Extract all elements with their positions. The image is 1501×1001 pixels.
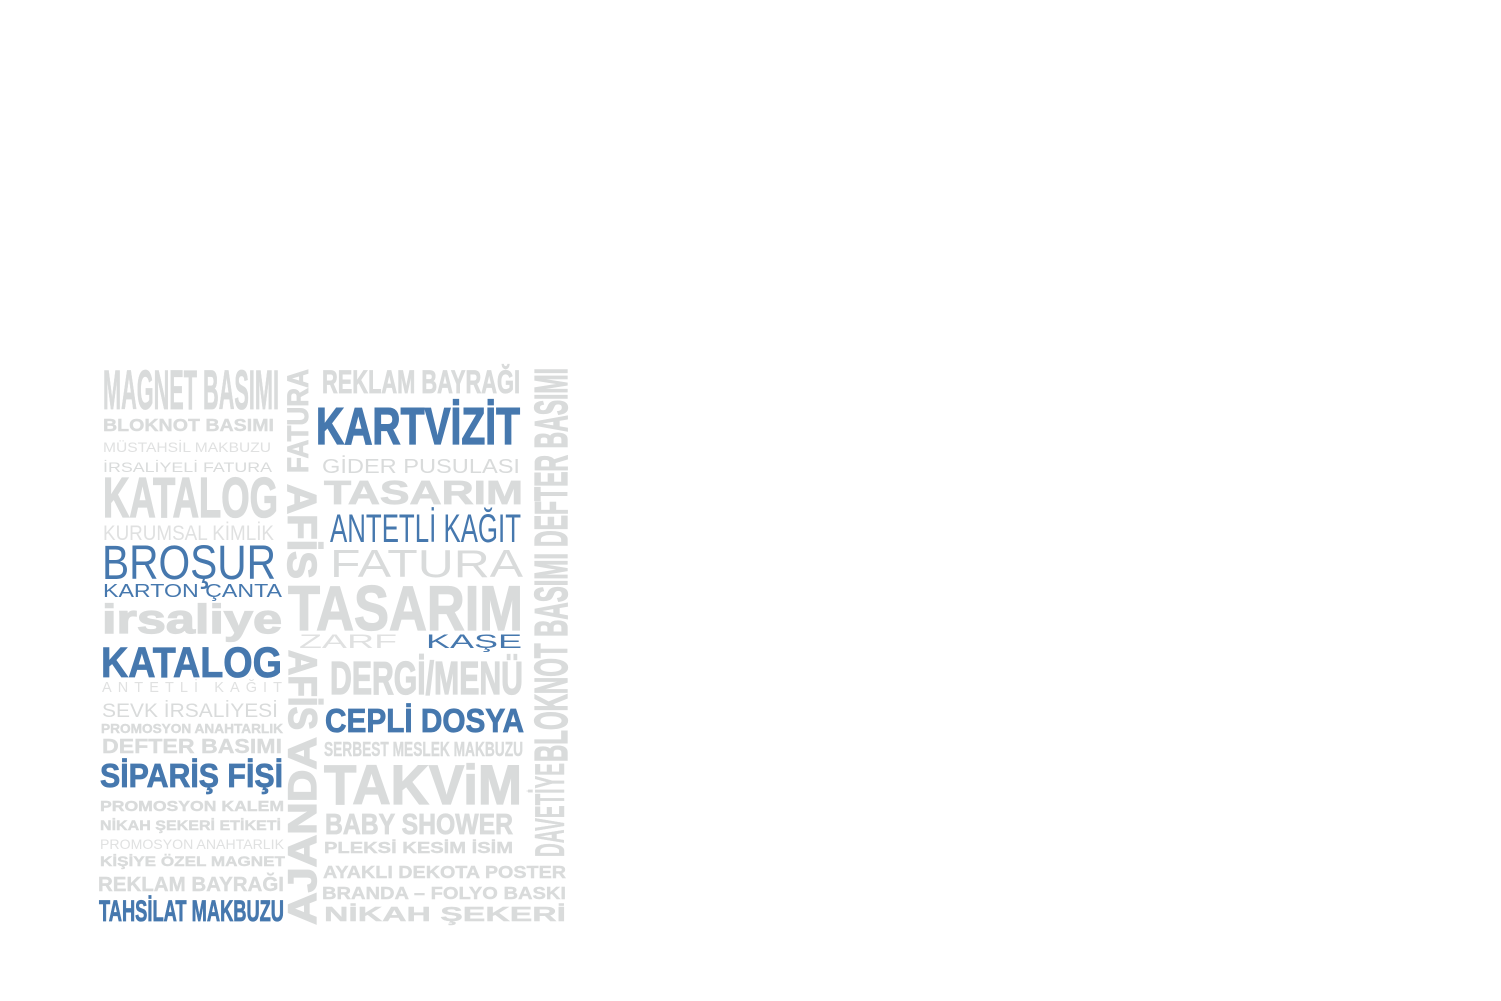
word: promosyon anahtarlık regular: PROMOSYON ANAHTARLIK	[100, 837, 284, 852]
word: nikah şekeri etiketi: NİKAH ŞEKERİ ETİKETİ	[100, 818, 281, 833]
word: takvim: TAKViM	[324, 753, 522, 816]
word: zarf: ZARF	[299, 632, 397, 653]
word: kartvizit: KARTVİZİT	[316, 398, 520, 456]
middle vertical column of words	[279, 369, 325, 925]
word: irsaliye: irsaliye	[102, 596, 282, 642]
word: ajanda vertical: AJANDA	[281, 737, 325, 925]
word: sipariş fişi: SİPARİŞ FİŞİ	[100, 757, 283, 794]
word: reklam bayrağı small: REKLAM BAYRAĞI	[98, 872, 284, 896]
word: antetli kağıt blue: ANTETLİ KAĞIT	[330, 506, 521, 551]
word: defter basimi: DEFTER BASIMI	[102, 736, 282, 758]
word: branda folyo baskı: BRANDA – FOLYO BASKI	[322, 883, 566, 903]
word: baby shower: BABY SHOWER	[325, 809, 513, 841]
word: antetli kağıt spaced: ANTETLİ KAĞIT	[102, 678, 282, 696]
word: broşur: BROŞUR	[102, 537, 276, 590]
word: fatura vertical: FATURA	[282, 369, 315, 473]
right column of words	[288, 364, 566, 926]
word: sevk irsaliyesi: SEVK İRSALİYESİ	[102, 699, 278, 722]
word: afiş vertical lower: AFİS	[280, 650, 324, 730]
word: nikah şekeri: NİKAH ŞEKERİ	[324, 903, 566, 926]
word: irsaliyeli fatura: İRSALİYELİ FATURA	[103, 458, 273, 475]
word: pleksi kesim isim: PLEKSİ KESİM İSİM	[324, 839, 513, 857]
word: fatura wide: FATURA	[330, 543, 523, 586]
word: cepli dosya: CEPLİ DOSYA	[325, 702, 524, 739]
word: dergi/menü: DERGİ/MENÜ	[330, 652, 523, 704]
word: dash: -	[526, 783, 530, 797]
word: katalog blue: KATALOG	[101, 639, 282, 687]
word: tasarım wide: TASARIM	[324, 474, 523, 511]
word: kaşe: KAŞE	[426, 632, 522, 653]
word: serbest meslek makbuzu: SERBEST MESLEK MAKBUZU	[324, 739, 523, 761]
word: tahsilat makbuzu: TAHSİLAT MAKBUZU	[99, 895, 284, 928]
word cloud: MAGNET BASIMI	[103, 358, 279, 421]
word: promosyon anahtarlık bold: PROMOSYON ANAHTARLIK	[101, 722, 283, 736]
word: gider pusulası: GİDER PUSULASI	[322, 455, 520, 478]
word: afiş vertical upper: AFİS	[279, 484, 325, 579]
word: reklam bayrağı large: REKLAM BAYRAĞI	[322, 364, 520, 400]
word: tasarım large: TASARIM	[288, 574, 523, 644]
word: bloknot basimi vertical: BLOKNOT BASIMI	[525, 553, 577, 762]
word: kurumsal kimlik: KURUMSAL KİMLİK	[103, 522, 274, 545]
word: kişiye özel magnet: KİŞİYE ÖZEL MAGNET	[100, 854, 286, 869]
word: karton çanta: KARTON ÇANTA	[103, 581, 282, 601]
word: defter basimi vertical: DEFTER BASIMI	[525, 368, 577, 547]
word: bloknot basimi: BLOKNOT BASIMI	[103, 415, 274, 435]
word: katalog grey: KATALOG	[103, 466, 278, 530]
left column of words	[98, 358, 286, 928]
right vertical column of words: DAVETİYE	[526, 763, 573, 857]
word: promosyon kalem: PROMOSYON KALEM	[100, 799, 284, 815]
word: ayaklı dekota poster: AYAKLI DEKOTA POSTER	[323, 862, 566, 882]
right vertical column of words	[525, 368, 577, 857]
word: müstahsil makbuzu: MÜSTAHSİL MAKBUZU	[103, 438, 271, 455]
